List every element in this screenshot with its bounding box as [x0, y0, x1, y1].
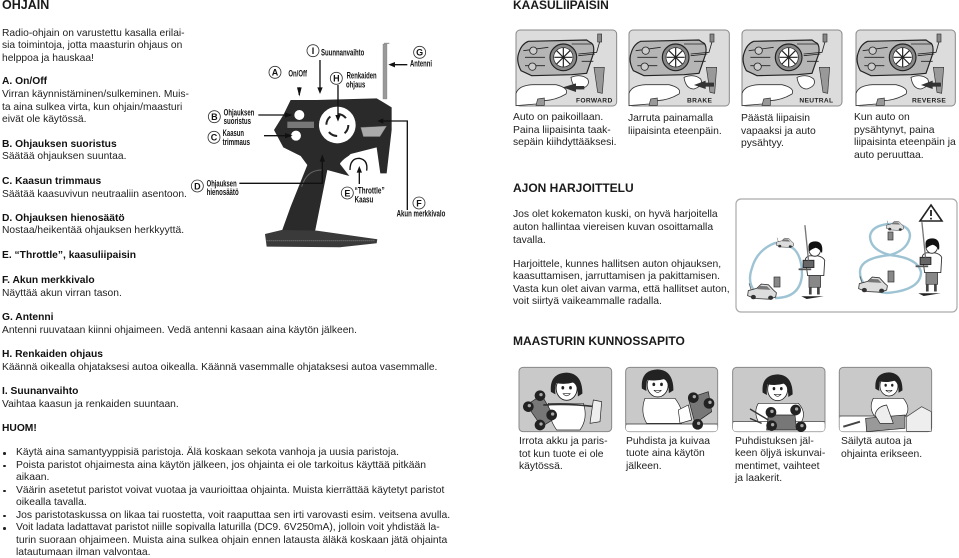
- callout labels: trimmaus: [223, 137, 250, 147]
- caption: maintenance 2: tuote aina käytön: [626, 448, 705, 459]
- text: A On/Off: ta aina sulkea virta, kun ohjain/maasturi: [2, 102, 182, 113]
- caption: neutral: pysähtyy.: [741, 138, 784, 149]
- illustration: throttle panel forward: [516, 30, 617, 106]
- callout labels: hienosäätö: [207, 187, 239, 197]
- controller body: [265, 98, 392, 247]
- heading: Ajon harjoittelu: AJON HARJOITTELU: [513, 181, 634, 195]
- text: H: H. Renkaiden ohjaus: [2, 349, 103, 360]
- text: Huom: HUOM!: [2, 423, 37, 434]
- list: battery warnings: Voit ladata ladattavat paristot niille sopivalla laturilla (DC9. 6V250mA), jolloin voit yhdistää la-: [16, 522, 440, 533]
- illustration: throttle panel reverse: [856, 30, 955, 106]
- illustration: throttle panel neutral: NEUTRAL: [799, 98, 833, 105]
- text: intro: [2, 28, 185, 64]
- illustration: throttle panel forward: FORWARD: [576, 98, 613, 105]
- caption: reverse: pysähtynyt, paina: [854, 125, 935, 136]
- text: C: C. Kaasun trimmaus: [2, 176, 101, 187]
- callout labels: Antenni: [410, 59, 432, 69]
- caption: forward: Paina liipaisinta taak-: [513, 125, 611, 136]
- text: B: [2, 139, 126, 162]
- callout labels: On/Off: [288, 68, 308, 78]
- callout text: D: [194, 181, 201, 191]
- caption: maintenance 1: käytössä.: [519, 461, 563, 472]
- list: battery warnings: aikaan.: [16, 472, 49, 483]
- caption: maintenance 1: Irrota akku ja paris-: [519, 436, 608, 447]
- text: H: [2, 349, 437, 373]
- heading: Maasturin kunnossapito: MAASTURIN KUNNOSSAPITO: [513, 334, 685, 348]
- text: I: I. Suunanvaihto: [2, 386, 78, 397]
- text: intro: sia toimintoja, jotta maasturin ohjaus on: [2, 40, 182, 51]
- list: battery warnings: Käytä aina samantyyppisiä paristoja. Älä koskaan sekota vanhoja ja uusia paristoja.: [16, 447, 399, 458]
- text: driving intro: auton hallintaa viereisen kuvan osoittamalla: [513, 222, 713, 233]
- text: G: G. Antenni: [2, 312, 54, 323]
- arrows: [239, 60, 407, 210]
- caption: maintenance 3: ja laakerit.: [735, 473, 782, 484]
- callout text: A: [272, 68, 279, 78]
- caption: maintenance 3: mentimet, vaihteet: [735, 461, 820, 472]
- callout text: F: [416, 198, 422, 208]
- text: A On/Off: Virran käynnistäminen/sulkeminen. Muis-: [2, 89, 189, 100]
- track and car: figure eight: [859, 221, 942, 296]
- caption: brake: Jarruta painamalla: [628, 113, 713, 124]
- callout text: E: [344, 188, 350, 198]
- callout labels: Suunnanvaihto: [321, 47, 365, 57]
- caption: reverse: liipaisinta eteenpäin ja: [854, 137, 956, 148]
- warning triangle: [920, 205, 942, 221]
- callout text: H: [333, 74, 340, 84]
- caption: maintenance 3: keen öljyä iskunvai-: [735, 448, 825, 459]
- caption: reverse: Kun auto on: [854, 112, 910, 123]
- caption: maintenance 4: [841, 436, 922, 460]
- illustration: throttle panel brake: BRAKE: [687, 98, 713, 105]
- callout labels: “Throttle”: [355, 186, 385, 196]
- text: F: F. Akun merkkivalo: [2, 275, 95, 286]
- list: battery warnings: oikealla tavalla.: [16, 497, 87, 508]
- list: battery warnings: [3, 446, 450, 558]
- throttle trigger: [340, 153, 369, 173]
- text: A On/Off: eivät ole käytössä.: [2, 114, 86, 125]
- callout labels: Ohjauksen: [207, 179, 237, 189]
- caption: maintenance 2: [626, 436, 710, 472]
- callout text: [194, 46, 423, 208]
- caption: reverse: auto peruuttaa.: [854, 150, 924, 161]
- callout labels: Kaasu: [355, 195, 373, 205]
- list: battery warnings: latautumaan ilman valvontaa.: [16, 547, 151, 558]
- callout text: I: [312, 46, 314, 56]
- callout letters: [191, 45, 426, 209]
- text: driving advice: [513, 259, 730, 307]
- caption: maintenance 1: [519, 436, 608, 472]
- list: battery warnings: Poista paristot ohjaimesta aina käytön jälkeen, jos ohjainta ei ole tarkoitus käyttää pitkään: [16, 460, 426, 470]
- callout labels: Ohjauksen: [224, 107, 254, 117]
- illustration: throttle panel neutral: [742, 30, 842, 106]
- callout text: C: [211, 133, 218, 143]
- illustration: maintenance panel 2: [626, 367, 718, 432]
- caption: maintenance 4: ohjainta erikseen.: [841, 449, 922, 460]
- caption: maintenance 2: Puhdista ja kuivaa: [626, 436, 710, 447]
- illustration: radio controller diagram: [191, 43, 446, 247]
- text: D: Nostaa/heikentää ohjauksen herkkyyttä.: [2, 225, 184, 236]
- text: A On/Off: A. On/Off: [2, 76, 47, 87]
- callout labels: ohjaus: [346, 79, 365, 89]
- illustration: driving practice panel: [736, 199, 957, 312]
- caption: maintenance 4: Säilytä autoa ja: [841, 436, 912, 447]
- text: driving intro: tavalla.: [513, 235, 546, 246]
- illustration: throttle panel brake: [629, 30, 729, 106]
- text: driving intro: Jos olet kokematon kuski, on hyvä harjoitella: [513, 209, 718, 220]
- callout labels: Kaasun: [223, 128, 244, 138]
- text: D: [2, 213, 184, 236]
- text: B: Säätää ohjauksen suuntaa.: [2, 151, 126, 162]
- text: driving advice: Vasta kun olet aivan varma, että hallitset auton,: [513, 284, 730, 295]
- steering wheel: [319, 107, 356, 143]
- text: intro: Radio-ohjain on varustettu kasalla erilai-: [2, 28, 185, 39]
- caption: brake: liipaisinta eteenpäin.: [628, 126, 722, 137]
- text: F: [2, 275, 122, 299]
- caption: maintenance 3: Puhdistuksen jäl-: [735, 436, 814, 447]
- callout labels: [207, 47, 446, 219]
- text: G: [2, 312, 357, 336]
- list: battery warnings: turin suoraan ohjaimeen. Muista aina sulkea ohjain ennen latausta äläkä koskaan jätä ohjainta: [16, 534, 447, 546]
- callout labels: suoristus: [224, 116, 251, 126]
- text: driving intro: [513, 209, 718, 246]
- caption: maintenance 2: jälkeen.: [626, 461, 662, 472]
- illustration: maintenance panel 3: [733, 367, 825, 432]
- caption: forward: sepäin kiihdyttääksesi.: [513, 137, 616, 148]
- text: G: Antenni ruuvataan kiinni ohjaimeen. Vedä antenni kasaan aina käytön jälkeen.: [2, 325, 357, 336]
- caption: maintenance 3: [734, 436, 825, 484]
- text: driving advice: Harjoittele, kunnes hallitsen auton ohjauksen,: [513, 259, 721, 270]
- text: driving advice: voit siirtyä vaikeammalle radalla.: [513, 296, 662, 307]
- text: A On/Off: [2, 76, 189, 125]
- caption: brake: [628, 113, 722, 137]
- caption: maintenance 1: tot kun tuote ei ole: [519, 449, 604, 460]
- text: I: [2, 386, 179, 410]
- illustration: maintenance panel 1: [519, 367, 612, 432]
- text: I: Vaihtaa kaasun ja renkaiden suuntaan.: [2, 399, 179, 410]
- list: battery warnings: Väärin asetetut paristot voivat vuotaa ja vaurioittaa ohjainta. Muista kierrättää käytetyt paristot: [16, 484, 444, 496]
- callout text: B: [211, 112, 218, 122]
- antenna: [383, 43, 389, 99]
- callout text: G: [416, 48, 423, 58]
- text: driving advice: kaasuttamisen, jarruttamisen ja pakittamisen.: [513, 271, 720, 282]
- text: F: Näyttää akun virran tason.: [2, 288, 122, 299]
- text: E: E. “Throttle”, kaasuliipaisin: [2, 250, 136, 261]
- list: battery warnings: Jos paristotaskussa on likaa tai ruostetta, voit raaputtaa sen irti varovasti esim. veitsena avulla.: [16, 510, 450, 520]
- caption: neutral: [741, 113, 816, 149]
- track and car: circle: [748, 225, 825, 300]
- text: intro: helppoa ja hauskaa!: [2, 53, 94, 64]
- text: D: D. Ohjauksen hienosäätö: [2, 213, 125, 224]
- callout labels: Akun merkkivalo: [397, 209, 446, 219]
- text: C: Säätää kaasuvivun neutraaliin asentoon.: [2, 189, 187, 200]
- text: B: B. Ohjauksen suoristus: [2, 139, 117, 150]
- text: H: Käännä oikealla ohjataksesi autoa oikealla. Käännä vasemmalle ohjataksesi autoa vasemmalle.: [2, 362, 437, 373]
- illustration: maintenance panel 4: [839, 367, 932, 432]
- caption: reverse: [854, 112, 956, 161]
- caption: neutral: Päästä liipaisin: [741, 113, 810, 124]
- illustration: throttle panel reverse: REVERSE: [912, 98, 946, 105]
- caption: forward: [513, 112, 616, 148]
- caption: forward: Auto on paikoillaan.: [513, 112, 603, 123]
- caption: neutral: vapaaksi ja auto: [741, 126, 816, 137]
- text: C: [2, 176, 187, 200]
- callout labels: Renkaiden: [347, 71, 377, 81]
